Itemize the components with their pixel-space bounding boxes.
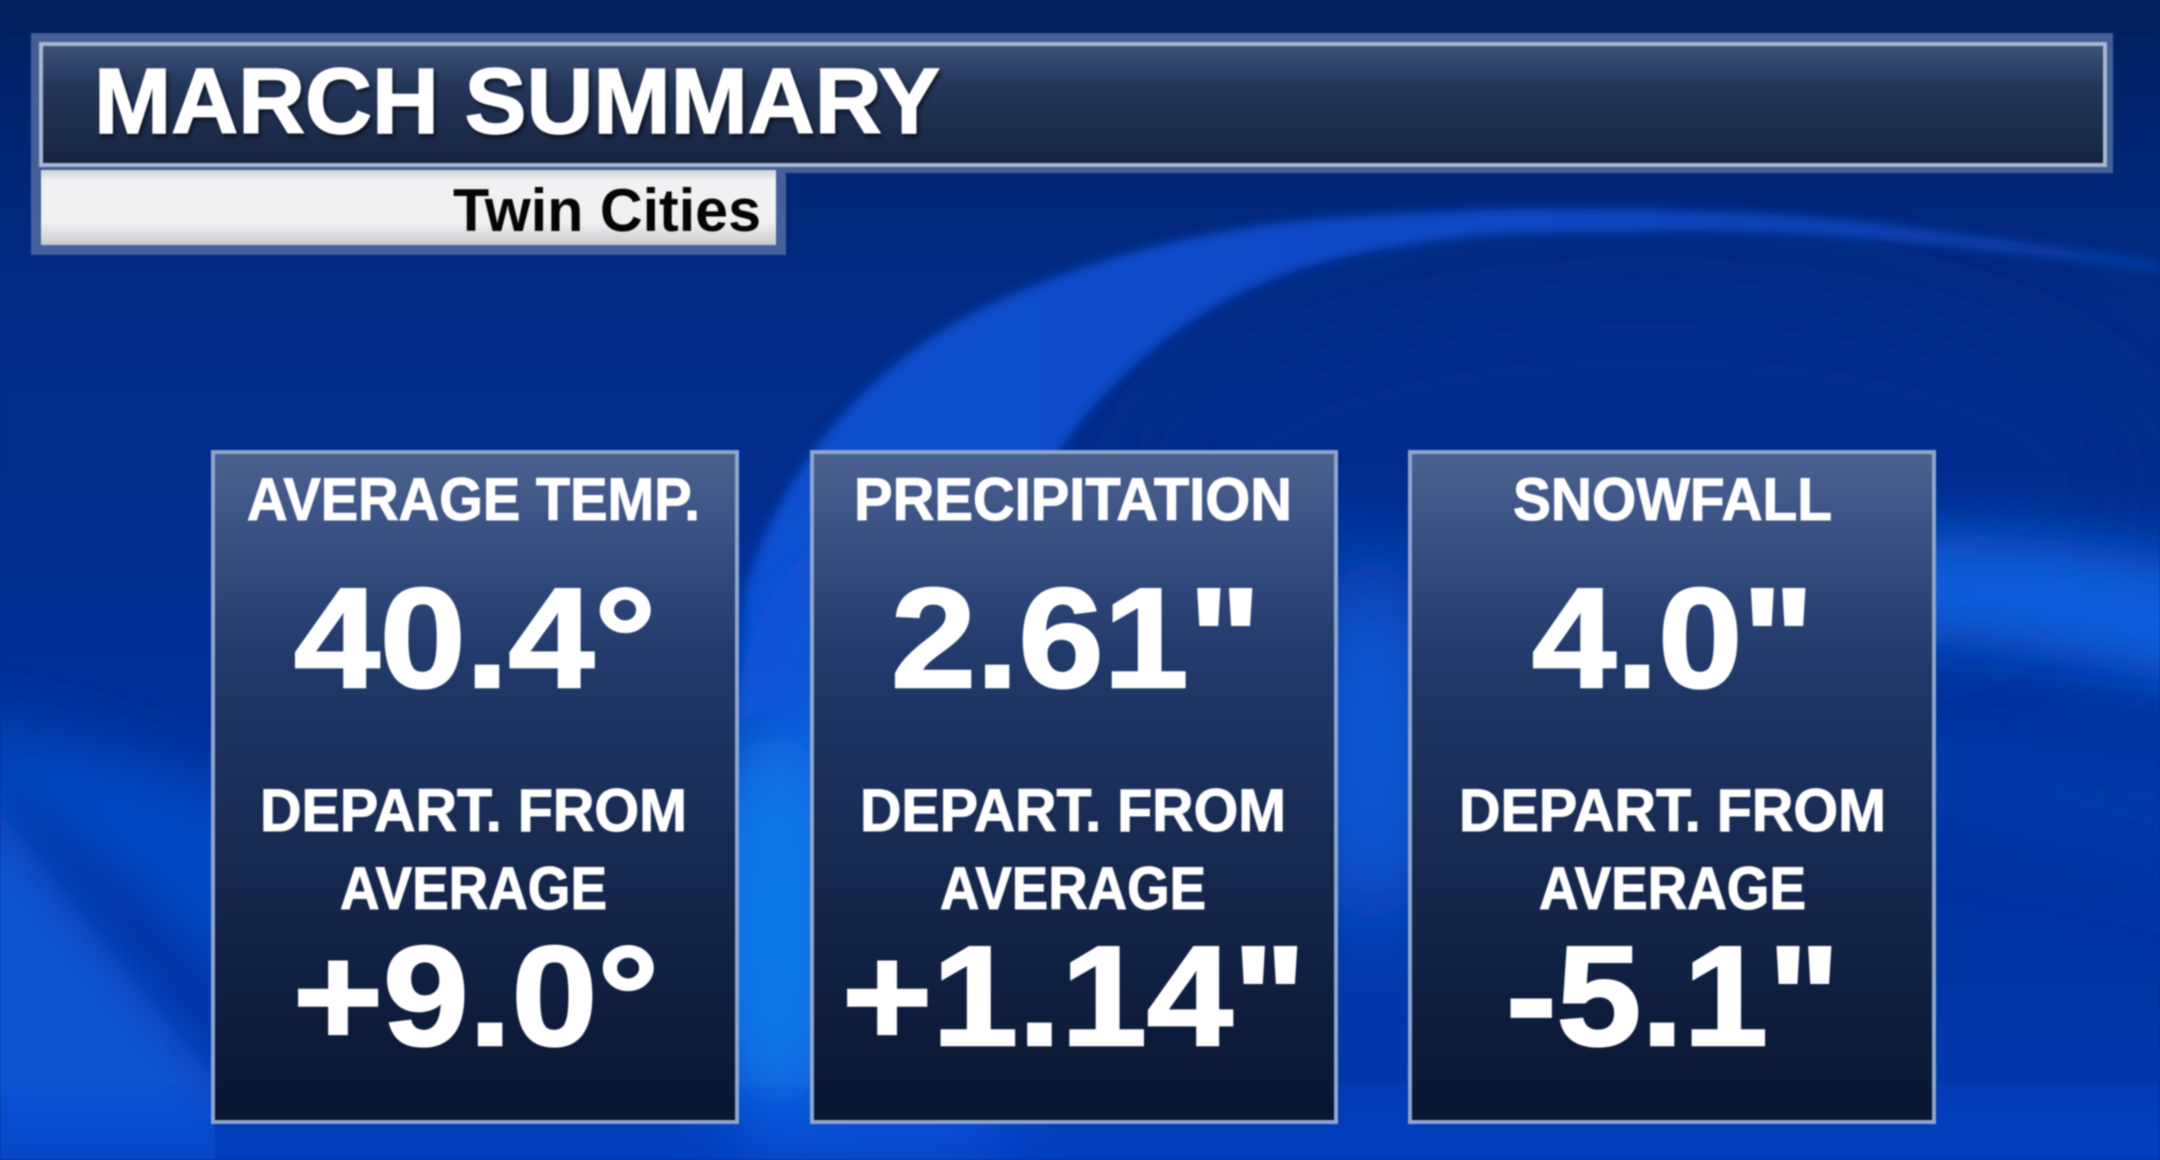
departure label: DEPART. FROM <box>860 777 1286 844</box>
departure value: +1.14" <box>842 917 1306 1076</box>
departure label line two: AVERAGE <box>340 855 607 922</box>
header banner <box>31 33 2113 255</box>
label: PRECIPITATION <box>854 466 1292 533</box>
label: SNOWFALL <box>1513 466 1832 533</box>
title bar <box>41 44 2105 165</box>
value: 4.0" <box>1532 559 1814 718</box>
departure value: +9.0° <box>293 917 659 1076</box>
label: AVERAGE TEMP. <box>247 466 700 533</box>
panel: snowfall <box>1410 452 1934 1122</box>
header outer frame <box>31 33 2113 255</box>
departure label line two: AVERAGE <box>940 855 1206 922</box>
subtitle bar <box>41 170 776 245</box>
value: 2.61" <box>891 559 1261 718</box>
departure label: DEPART. FROM <box>260 777 687 844</box>
value: 40.4° <box>294 559 656 718</box>
title: MARCH SUMMARY <box>94 49 940 153</box>
departure label line two: AVERAGE <box>1539 855 1806 922</box>
panel: average temperature <box>213 452 737 1122</box>
panel: precipitation <box>812 452 1336 1122</box>
departure label: DEPART. FROM <box>1459 777 1886 844</box>
departure value: -5.1" <box>1506 917 1840 1076</box>
subtitle: Twin Cities <box>453 177 761 244</box>
